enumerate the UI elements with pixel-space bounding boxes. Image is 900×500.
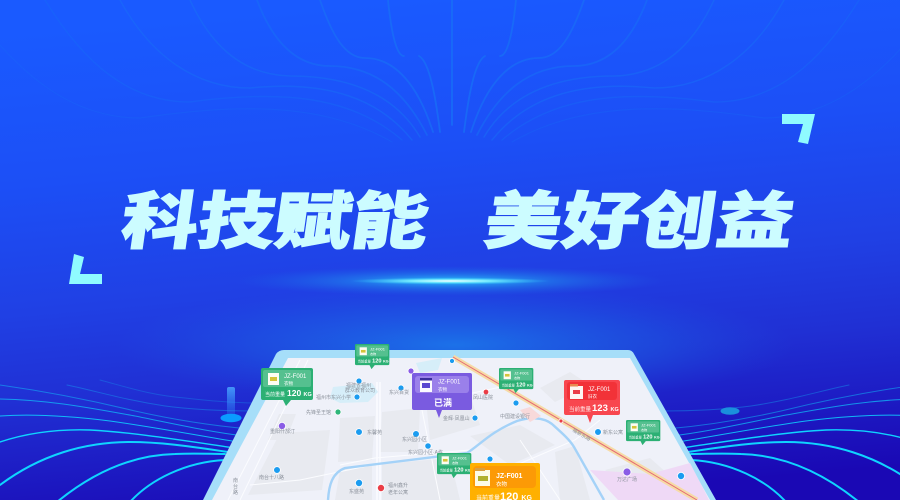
map panel [203, 350, 716, 500]
bottom right wave lines [661, 385, 900, 500]
pin: small green by road: 衣物 [514, 375, 520, 380]
map labels: 台 [233, 483, 238, 490]
map labels: 东兴园小区 [402, 436, 427, 443]
pin: small green bottom [437, 453, 471, 478]
pink plaza [590, 463, 709, 500]
pin: purple full: 衣物 [438, 386, 447, 393]
pin: red: JZ-F001 [588, 387, 611, 393]
map point icons [274, 358, 685, 487]
pin: small green top: 120 KG [372, 358, 389, 364]
light flare [235, 266, 665, 296]
pin: small green top [355, 344, 389, 369]
pin: small green top: 衣物 [370, 351, 376, 356]
bottom left wave lines [0, 380, 260, 500]
pin: large green left: 当前重量 [265, 391, 285, 398]
pink block [520, 407, 541, 422]
pin: small green right: 120 KG [643, 434, 660, 440]
map labels: 福州市东兴小学 [316, 394, 351, 401]
pin: small green by road: JZ-F001 [514, 371, 529, 376]
canal [328, 418, 604, 500]
map labels: 东盛苑 [349, 488, 364, 495]
corner bracket bottom left [69, 254, 102, 284]
pin: small green by road [499, 368, 533, 393]
map labels: 路 [233, 489, 238, 496]
pin: small green by road: 120 KG [516, 382, 533, 388]
pin: orange: 衣物 [496, 480, 508, 488]
pin: large green left: 衣物 [284, 380, 293, 387]
map labels: 东兴百货 [389, 389, 409, 396]
map labels: 南 [233, 477, 238, 484]
pin: small green right: 衣物 [641, 427, 647, 432]
pin: red: 123 KG [592, 403, 619, 414]
pin: small green by road: 当前重量 [502, 382, 516, 387]
pin: purple full: JZ-F001 [438, 380, 461, 386]
pin: small green bottom: JZ-F001 [452, 456, 467, 461]
pin: large green left [261, 368, 313, 406]
bottom centre glow [115, 285, 795, 405]
map labels: 先锋圣王馆 [306, 409, 331, 416]
map labels: 新东公寓 [603, 429, 623, 436]
map labels: 南台十八路 [259, 474, 284, 481]
main highway [453, 357, 697, 500]
pin: small green right: 当前重量 [629, 434, 643, 439]
map labels [233, 382, 637, 496]
map labels: 老年公寓 [388, 489, 408, 496]
map labels: 福新东路 [571, 427, 592, 443]
pin: red [564, 380, 620, 423]
left marker pillar [220, 387, 242, 422]
grey city blocks [248, 372, 668, 500]
water pond [330, 358, 442, 403]
title right: 美好创益: 美好创益 [480, 187, 799, 256]
pin: small green bottom: 衣物 [452, 460, 458, 465]
map labels: 东馨苑 [367, 429, 382, 436]
purple and green icons [278, 368, 631, 476]
pin: large green left: 120 KG [287, 388, 312, 398]
map labels: 重阳什邡汀 [270, 428, 295, 435]
pin: small green right [626, 420, 660, 445]
map labels: 中国建设银行 [500, 413, 530, 420]
pin: orange: JZ-F001 [496, 473, 523, 480]
pin: small green bottom: 120 KG [454, 467, 471, 473]
pin: purple full [412, 373, 472, 418]
top arc lines [0, 0, 900, 142]
pin: small green right: JZ-F001 [641, 423, 656, 428]
map labels: 群众教育公司 [345, 387, 375, 394]
pin: small green top: JZ-F001 [370, 347, 385, 352]
map labels: 福建省福州 [346, 382, 371, 389]
map frame [203, 350, 716, 500]
red icons [377, 389, 563, 492]
map labels: 凤山医院 [473, 394, 493, 401]
map ground [212, 358, 710, 500]
title left: 科技赋能: 科技赋能 [117, 187, 433, 256]
corner bracket top right [782, 114, 815, 144]
right marker disc [720, 407, 740, 415]
map labels: 东兴园小区·A栋 [408, 449, 443, 456]
pin: red: 当前重量 [569, 405, 592, 413]
map labels: 福州鑫升 [388, 482, 408, 489]
pin: small green bottom: 当前重量 [440, 467, 454, 472]
map labels: 万达广场 [617, 476, 637, 483]
pin: orange [470, 463, 540, 500]
pin: small green top: 当前重量 [358, 358, 372, 363]
map labels: 金辉·凤凰山 [443, 415, 470, 422]
white roads [228, 360, 600, 500]
pin: purple full: 已满 [434, 397, 452, 408]
pin: red: 旧衣 [588, 393, 597, 400]
pin: large green left: JZ-F001 [284, 374, 307, 380]
